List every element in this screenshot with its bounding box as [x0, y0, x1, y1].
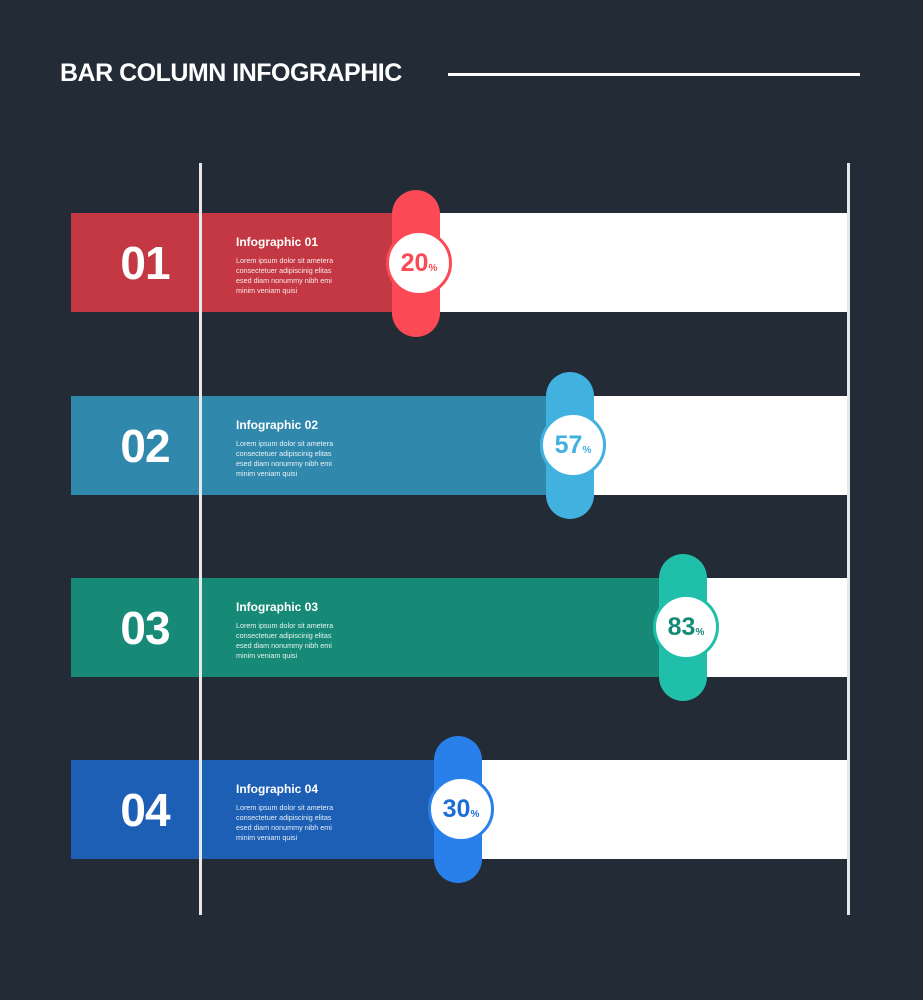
- bar 4: Infographic 04: [236, 782, 318, 796]
- bar 4: [71, 760, 848, 859]
- vertical lines: [199, 163, 202, 915]
- bar 1: 01: [120, 237, 170, 289]
- marker 1: [392, 190, 440, 337]
- bar 4: 04: [120, 784, 170, 836]
- bar 2: 02: [120, 420, 170, 472]
- bar 3: Lorem ipsum dolor sit ametera consectetuer adipiscinig elitas esed diam nonummy nibh emi minim veniam quisi: [236, 621, 333, 660]
- bar 2: Infographic 02: [236, 418, 318, 432]
- bar 2: Lorem ipsum dolor sit ametera consectetuer adipiscinig elitas esed diam nonummy nibh emi minim veniam quisi: [236, 439, 333, 478]
- bar 4: Lorem ipsum dolor sit ametera consectetuer adipiscinig elitas esed diam nonummy nibh emi minim veniam quisi: [236, 803, 333, 842]
- text: 20%: [401, 249, 437, 277]
- text: 30%: [443, 795, 479, 823]
- title: BAR COLUMN INFOGRAPHIC: [60, 59, 402, 87]
- text: 83%: [668, 613, 704, 641]
- bar 1: [71, 213, 848, 312]
- bar 3: [71, 578, 848, 677]
- marker 4: [434, 736, 482, 883]
- bar 3: Infographic 03: [236, 600, 318, 614]
- text: 57%: [555, 431, 591, 459]
- bar 3: 03: [120, 602, 170, 654]
- marker 3: [659, 554, 707, 701]
- marker 2: [546, 372, 594, 519]
- bar 1: Lorem ipsum dolor sit ametera consectetuer adipiscinig elitas esed diam nonummy nibh emi minim veniam quisi: [236, 256, 333, 295]
- bar 2: [71, 396, 848, 495]
- bar 1: Infographic 01: [236, 235, 318, 249]
